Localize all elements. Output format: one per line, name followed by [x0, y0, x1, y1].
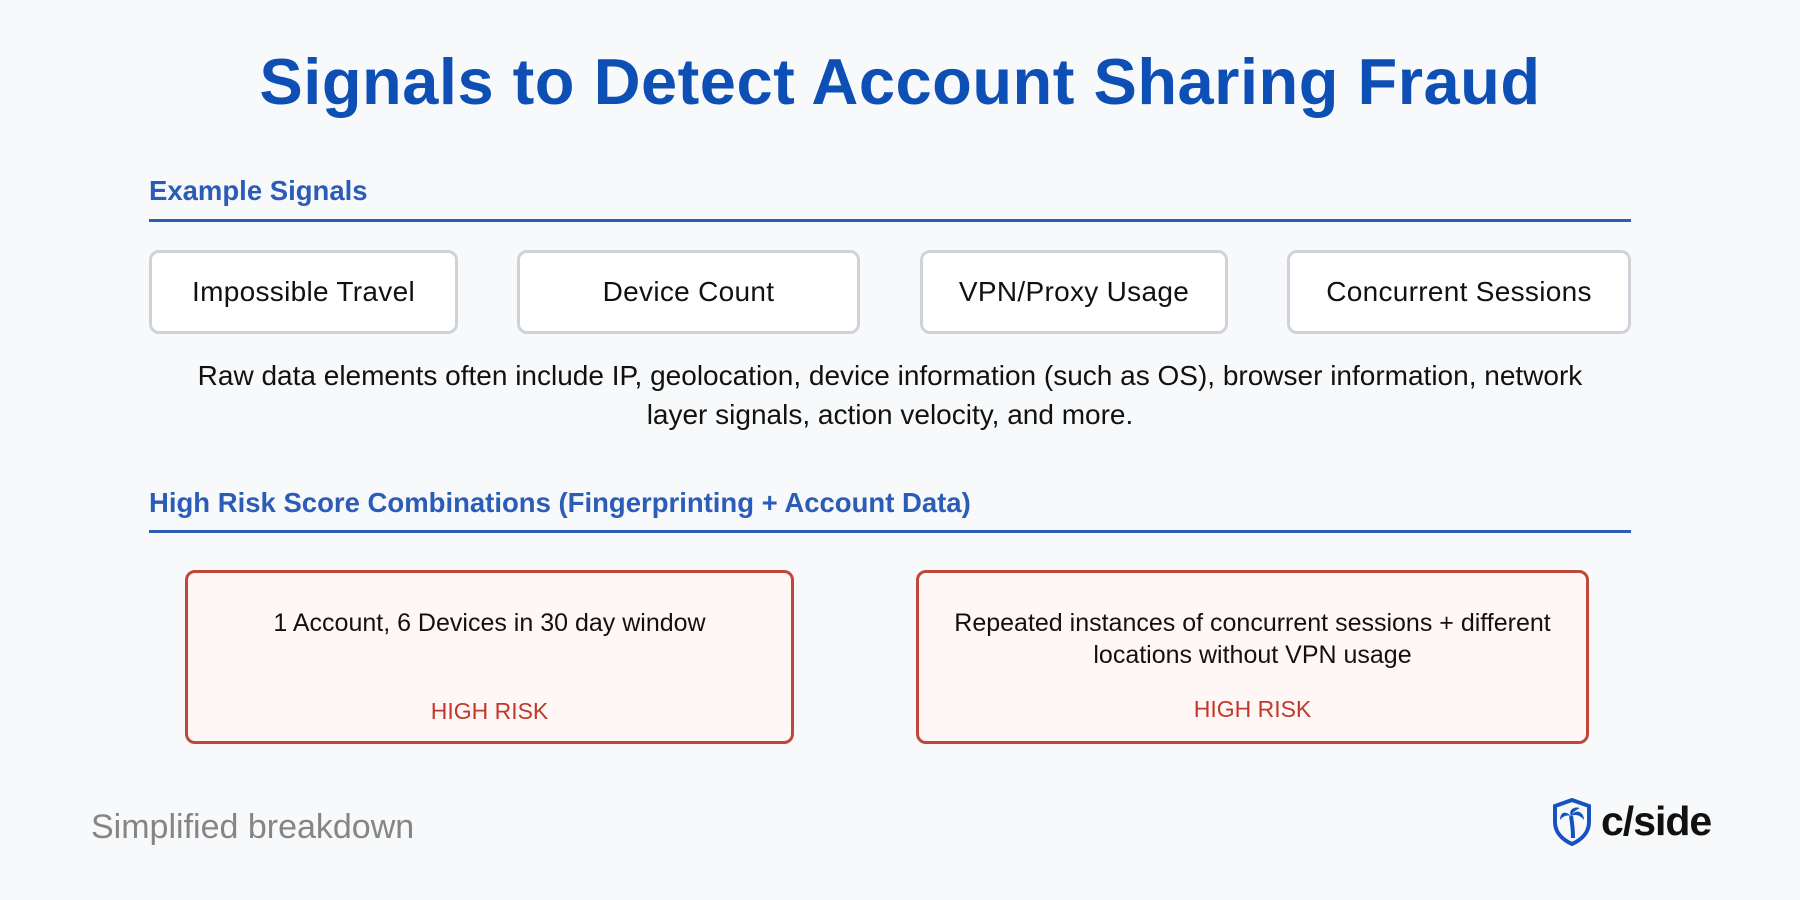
risk card 2: Repeated instances of concurrent sessions + different	[954, 609, 1551, 637]
signal: concurrent sessions: Concurrent Sessions	[1326, 276, 1592, 307]
risk card 1	[185, 570, 794, 744]
signal: device count: Device Count	[603, 276, 774, 307]
heading: example signals: Example Signals	[149, 175, 368, 206]
label: high risk: HIGH RISK	[1194, 696, 1311, 722]
footer note: Simplified breakdown	[91, 808, 414, 846]
logo: c/side: c/side	[1601, 798, 1711, 844]
signal: vpn/proxy: VPN/Proxy Usage	[959, 276, 1189, 307]
risk card 1: 1 Account, 6 Devices in 30 day window	[273, 609, 706, 637]
title: Signals to Detect Account Sharing Fraud	[259, 45, 1541, 118]
logo: c/side	[1553, 798, 1711, 846]
label: high risk: HIGH RISK	[431, 698, 548, 724]
signal: impossible travel	[149, 250, 458, 334]
signal: impossible travel: Impossible Travel	[192, 276, 415, 307]
text: raw data description: Raw data elements often include IP, geolocation, device information (such as OS), browser information, network	[198, 360, 1582, 391]
signal: concurrent sessions	[1287, 250, 1631, 334]
signal: device count	[517, 250, 860, 334]
risk card 2	[916, 570, 1589, 744]
text: raw data description	[198, 360, 1582, 430]
text: raw data description: layer signals, action velocity, and more.	[647, 399, 1133, 430]
icon: shield palm	[1553, 798, 1591, 846]
signal: vpn/proxy	[920, 250, 1228, 334]
risk card 2: locations without VPN usage	[1093, 641, 1412, 669]
heading: high risk combinations: High Risk Score Combinations (Fingerprinting + Account Data)	[149, 487, 971, 518]
